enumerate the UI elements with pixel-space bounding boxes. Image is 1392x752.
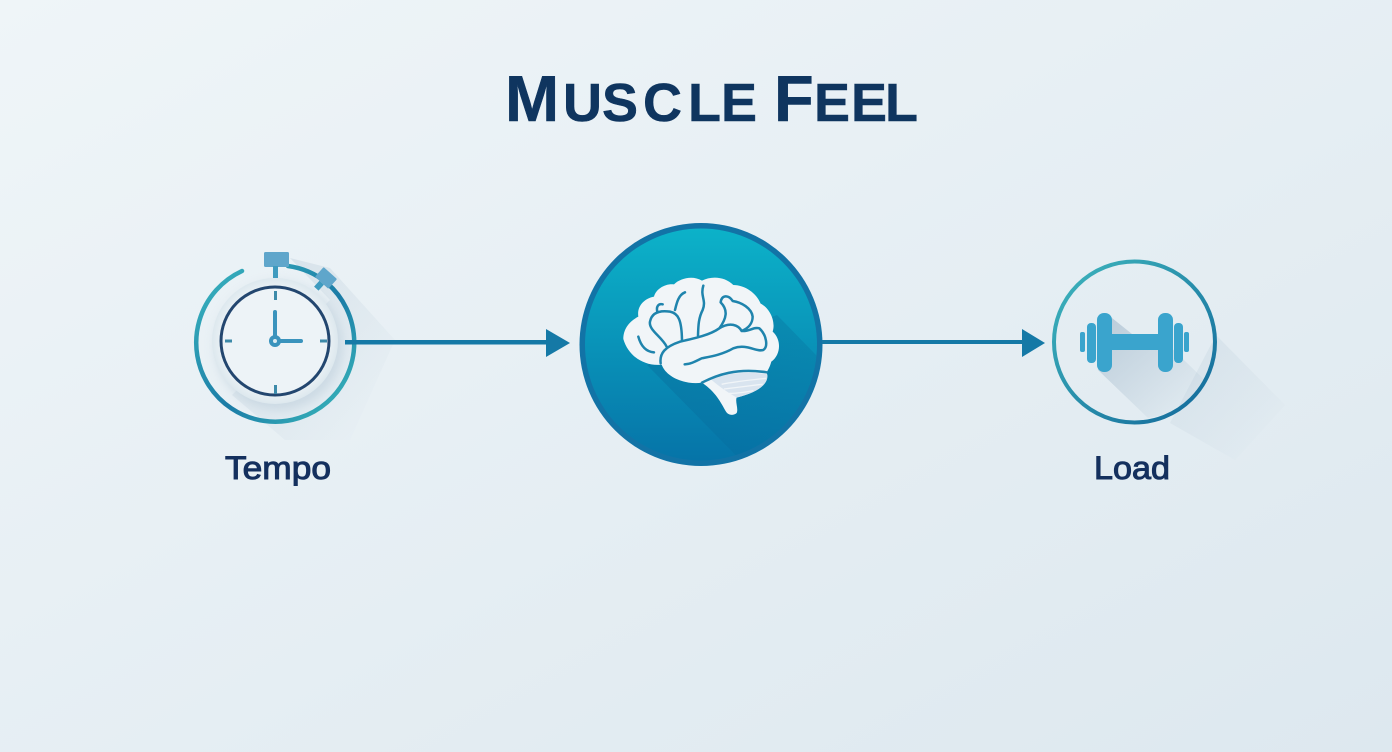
progress ring [196,266,354,422]
arrow: tempo to brain [345,329,570,357]
label: Load: Load [1094,450,1170,486]
clock hands [269,310,303,347]
stopwatch face [221,287,329,395]
dumbbell shadow [1098,318,1196,418]
disc [580,223,822,466]
cerebellum [710,373,767,398]
arrow: brain to load [822,329,1045,357]
brain sulci [638,286,767,383]
cerebellum folds [722,378,766,393]
stopwatch side button [310,267,337,295]
label: Tempo: Tempo [225,450,331,486]
stopwatch bezel [212,278,338,404]
title: EEL [814,73,918,133]
brain silhouette [623,278,779,415]
tick marks [225,291,327,394]
title: F [774,62,814,135]
stopwatch crown [264,252,289,278]
brain shadow [648,315,816,412]
dumbbell [1080,313,1189,372]
icon: dumbbell (Load) [1052,260,1238,426]
icon: stopwatch (Tempo) [196,252,395,440]
title: USCLE [563,73,757,133]
icon: brain disc [580,223,822,466]
bezel soft shadow [215,282,343,410]
title [505,62,918,135]
outer long shadow [1170,335,1285,460]
ring [1054,262,1215,422]
stopwatch long shadow [232,258,395,440]
brain [623,278,779,415]
title: M [505,62,559,135]
